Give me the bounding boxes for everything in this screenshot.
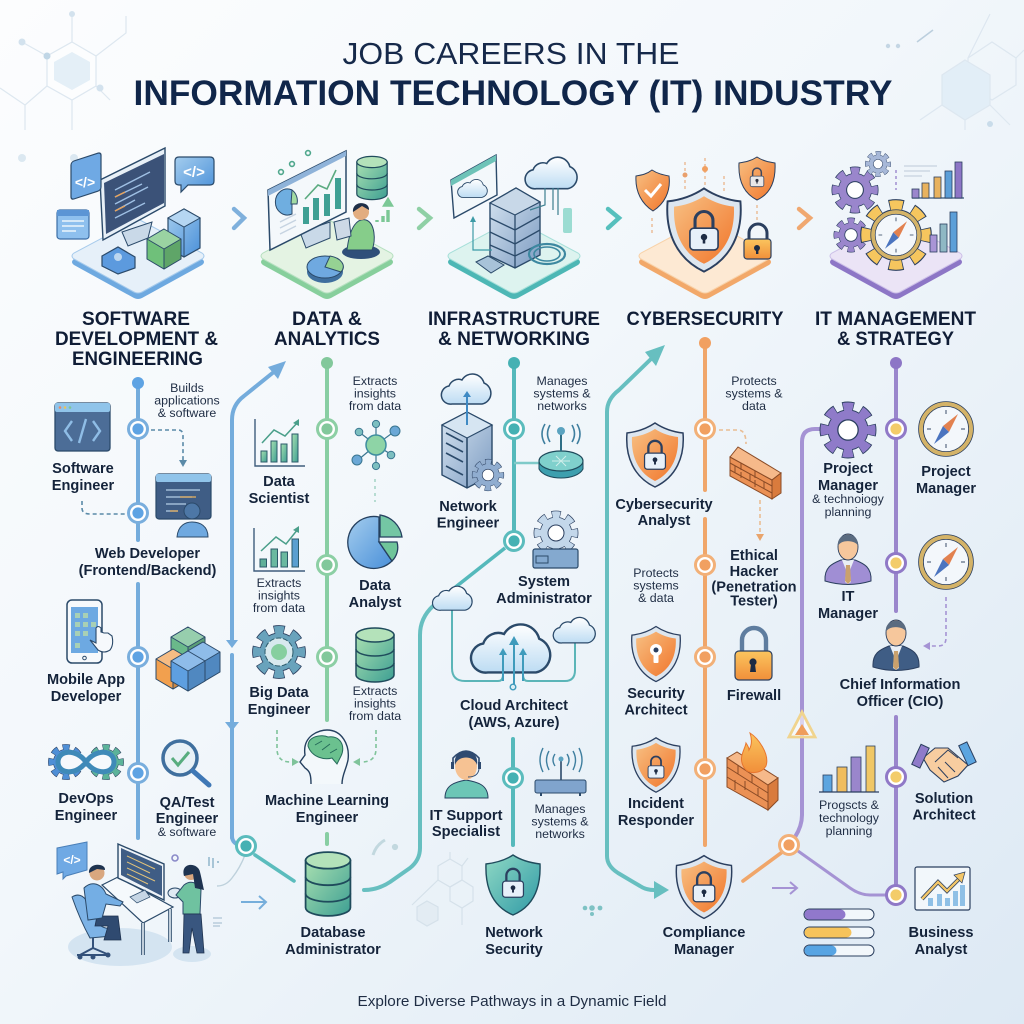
- icon: network security shield: [486, 855, 540, 915]
- description: & data: [638, 591, 674, 605]
- connector: teal route to cybersecurity and compliance: [607, 345, 669, 899]
- label: Project: [921, 464, 971, 480]
- label: Manager: [916, 481, 976, 497]
- label: Software: [52, 461, 114, 477]
- warning triangle marker: [789, 712, 815, 737]
- decoration: hexagon network top left: [0, 11, 126, 162]
- description: systems &: [533, 386, 591, 400]
- label: Mobile App: [47, 672, 125, 688]
- heading: infrastructure & networking: [428, 309, 600, 350]
- description: systems &: [531, 814, 589, 828]
- icon: cloud architecture: [433, 586, 595, 690]
- label: Network: [485, 925, 544, 941]
- panel: infrastructure and networking roles: [412, 357, 602, 958]
- description: data: [742, 399, 766, 413]
- label: Engineer: [296, 810, 359, 826]
- label: Manager: [818, 606, 878, 622]
- icon: project manager gear: [825, 407, 871, 453]
- label: Administrator: [285, 942, 381, 958]
- label: (AWS, Azure): [468, 715, 560, 731]
- icon: IT management isometric scene: [830, 154, 964, 299]
- node: [128, 764, 148, 782]
- description: Manages: [537, 374, 587, 388]
- icon: QA magnifier: [163, 741, 209, 785]
- node: [318, 420, 336, 438]
- label: Machine Learning: [265, 793, 389, 809]
- dashed arrow: [923, 597, 946, 650]
- description: from data: [253, 601, 305, 615]
- label: Security: [627, 686, 686, 702]
- node: [504, 768, 522, 788]
- icon: devops infinity: [52, 748, 120, 776]
- label: Cloud Architect: [460, 698, 568, 714]
- icon: database administrator: [306, 852, 350, 916]
- node: [318, 556, 336, 574]
- decorative link icon: [373, 840, 397, 855]
- description: planning: [826, 824, 873, 838]
- label: System: [518, 574, 570, 590]
- label: Business: [909, 925, 973, 941]
- node: [128, 504, 148, 522]
- description: & technoiogy: [812, 492, 885, 506]
- timeline: [513, 363, 514, 845]
- timeline: [136, 383, 140, 838]
- description: systems: [633, 578, 679, 592]
- panel: software development roles: [47, 377, 220, 839]
- dashed connector: [82, 501, 127, 514]
- start dot: [508, 357, 520, 369]
- arrow: chevron to infrastructure: [419, 209, 430, 228]
- decorative dots: [583, 905, 602, 916]
- label: Security: [485, 942, 544, 958]
- node: [696, 420, 714, 438]
- node: [886, 886, 906, 904]
- heading: IT management & strategy: [815, 309, 976, 350]
- icon: cybersecurity isometric scene: [636, 157, 775, 299]
- label: Compliance: [663, 925, 745, 941]
- label: Solution: [915, 791, 973, 807]
- heading: data & analytics: ANALYTICS: [274, 329, 380, 350]
- label: Engineer: [248, 702, 311, 718]
- label: Specialist: [432, 824, 500, 840]
- icon: infrastructure isometric scene: [448, 155, 580, 299]
- icon: big data gear: [257, 630, 301, 674]
- icon: handshake: [912, 742, 976, 782]
- label: Database: [301, 925, 365, 941]
- icon: security architect shield: [632, 626, 680, 682]
- icon: cybersecurity analyst shield: [627, 423, 683, 487]
- footer tagline: Explore Diverse Pathways in a Dynamic Field: [358, 994, 666, 1010]
- title: INFORMATION TECHNOLOGY (IT) INDUSTRY: [134, 74, 892, 113]
- description: Manages: [535, 802, 585, 816]
- label: Big Data: [249, 685, 309, 701]
- connector: orange branch: [743, 853, 781, 881]
- start dot: [890, 357, 902, 369]
- label: IT: [842, 589, 855, 605]
- label: Hacker: [730, 564, 779, 580]
- label: (Penetration: [711, 580, 797, 596]
- arrow: small blue right arrow: [241, 896, 266, 909]
- label: Incident: [628, 796, 684, 812]
- heading: data & analytics: [274, 309, 380, 350]
- heading: software development & engineering: SOFTWARE: [82, 309, 190, 330]
- description: insights: [354, 696, 396, 710]
- label: Network: [439, 499, 498, 515]
- icon: CIO person: [873, 620, 919, 670]
- label: Cybersecurity: [615, 497, 714, 513]
- label: Data: [359, 578, 392, 594]
- label: DevOps: [58, 791, 114, 807]
- start dot: [699, 337, 711, 349]
- start dot: [132, 377, 144, 389]
- description: systems &: [725, 386, 783, 400]
- label: Scientist: [249, 491, 310, 507]
- icon: mobile phone with hand: [67, 600, 113, 663]
- description: & software: [158, 825, 216, 839]
- icon: compliance shield: [676, 856, 732, 918]
- label: Tester): [730, 594, 778, 610]
- icon: database: [356, 628, 394, 682]
- timeline: [703, 343, 707, 845]
- connector: blue path to data column: [225, 361, 286, 846]
- dashed arrow: [719, 430, 746, 444]
- label: Responder: [618, 813, 694, 829]
- arrow: chevron to data: [234, 209, 244, 228]
- description: from data: [349, 399, 401, 413]
- node: [886, 420, 906, 438]
- timeline: [325, 363, 329, 844]
- heading: infrastructure & networking: INFRASTRUCTURE: [428, 309, 600, 330]
- teal junction node: [236, 836, 256, 856]
- icon: software development isometric scene: </>: [183, 164, 205, 181]
- label: Engineer: [437, 516, 500, 532]
- description: Extracts: [353, 374, 397, 388]
- label: Web Developer: [95, 546, 200, 562]
- label: Architect: [912, 808, 976, 824]
- heading: software development & engineering: ENGINEERING: [72, 349, 203, 370]
- panel: IT management roles: [780, 357, 976, 958]
- icon: web developer: [156, 474, 211, 537]
- icon: business analyst chart: [915, 867, 970, 910]
- label: Analyst: [638, 513, 690, 529]
- label: Engineer: [55, 808, 118, 824]
- label: Manager: [818, 478, 878, 494]
- label: Chief Information: [840, 677, 960, 693]
- diagonal connector: [448, 548, 505, 593]
- heading: software development & engineering: [55, 309, 218, 370]
- illustration: developers at a desk: [57, 842, 245, 966]
- icon: compass: [921, 537, 971, 587]
- connector: purple route: [789, 429, 886, 895]
- node: [696, 760, 714, 778]
- node: [696, 556, 714, 574]
- dashed arrow: [756, 500, 764, 541]
- branch connector: [514, 462, 540, 464]
- description: Protects: [633, 566, 679, 580]
- node: [128, 648, 148, 666]
- icon: system administrator gear and server: [533, 515, 578, 568]
- description: networks: [537, 399, 587, 413]
- teal branch: [255, 855, 294, 881]
- label: Engineer: [52, 478, 115, 494]
- label: Ethical: [730, 548, 778, 564]
- description: & software: [158, 406, 216, 420]
- icon: data scientist chart: [255, 419, 305, 466]
- node: [504, 532, 524, 550]
- label: Firewall: [727, 688, 781, 704]
- heading: infrastructure & networking: & NETWORKING: [438, 329, 590, 350]
- icon: IT support agent: [445, 751, 488, 798]
- label: QA/Test: [160, 795, 215, 811]
- arrow: small purple right arrow: [772, 882, 797, 894]
- icon: router: [539, 424, 583, 478]
- decorative hexagons: [412, 852, 473, 926]
- icon: pie chart: [348, 515, 402, 568]
- heading: IT management & strategy: & STRATEGY: [837, 329, 954, 350]
- heading: data & analytics: DATA &: [292, 309, 362, 330]
- node: [886, 768, 906, 786]
- decoration: hexagon network top right: [886, 14, 1024, 130]
- heading: IT management & strategy: IT MANAGEMENT: [815, 309, 976, 330]
- label: Developer: [51, 689, 122, 705]
- label: Officer (CIO): [857, 694, 944, 710]
- icon: compass: [921, 404, 971, 454]
- timeline: [894, 363, 898, 885]
- node: orange junction: [780, 836, 798, 854]
- description: Extracts: [257, 576, 301, 590]
- heading: cybersecurity: CYBERSECURITY: [626, 309, 784, 330]
- node: [886, 554, 906, 572]
- icon: IT manager person: [825, 534, 871, 584]
- dashed arrow: [151, 430, 187, 467]
- description: Builds: [170, 381, 204, 395]
- description: Protects: [731, 374, 777, 388]
- label: Project: [823, 461, 873, 477]
- connector: teal path from system administrator to database: [364, 606, 433, 890]
- heading: software development & engineering: DEVELOPMENT &: [55, 329, 218, 350]
- title: [134, 36, 892, 113]
- icon: brick firewall: [730, 447, 781, 499]
- label: Engineer: [156, 811, 219, 827]
- arrow: chevron to cybersecurity: [608, 209, 619, 228]
- icon: machine learning head: [277, 730, 376, 784]
- icon: padlock: [735, 628, 772, 680]
- label: Administrator: [496, 591, 592, 607]
- icon: software development isometric scene: [57, 148, 214, 299]
- panel: data and analytics roles: [236, 357, 402, 958]
- start dot: [321, 357, 333, 369]
- icon: network hub: [352, 420, 400, 470]
- description: from data: [349, 709, 401, 723]
- title: JOB CAREERS IN THE: [342, 36, 680, 71]
- label: Analyst: [349, 595, 401, 611]
- icon: bar chart with trend: [254, 526, 305, 571]
- panel: cybersecurity roles: [615, 337, 797, 958]
- label: (Frontend/Backend): [79, 563, 217, 579]
- description: Extracts: [353, 684, 397, 698]
- icon: incident responder shield: [632, 738, 680, 792]
- node: [504, 420, 524, 438]
- icon: wifi router: [535, 748, 586, 796]
- icon: software engineer window: [55, 403, 110, 451]
- label: Analyst: [915, 942, 967, 958]
- description: networks: [535, 827, 585, 841]
- label: Architect: [624, 702, 688, 718]
- icon: progress bars: [804, 909, 874, 956]
- description: technology: [819, 811, 880, 825]
- description: applications: [154, 394, 220, 408]
- dashed connector: [374, 479, 376, 502]
- arrow: chevron to management: [799, 209, 810, 228]
- icon: burning firewall: [727, 733, 778, 810]
- description: Progscts &: [819, 798, 880, 812]
- illustration: developers at a desk: </>: [63, 853, 81, 867]
- icon: bar chart: [819, 746, 879, 792]
- icon: stacked blocks: [156, 627, 220, 691]
- icon: network engineer server: [441, 374, 501, 488]
- icon: data analytics isometric scene: [261, 151, 393, 299]
- label: Manager: [674, 942, 734, 958]
- description: planning: [825, 505, 872, 519]
- label: Data: [263, 474, 296, 490]
- description: insights: [354, 386, 396, 400]
- icon: software development isometric scene: </>: [75, 174, 95, 190]
- node: [128, 420, 148, 438]
- description: insights: [258, 588, 300, 602]
- node: [696, 648, 714, 666]
- node: [318, 648, 336, 666]
- label: IT Support: [430, 808, 503, 824]
